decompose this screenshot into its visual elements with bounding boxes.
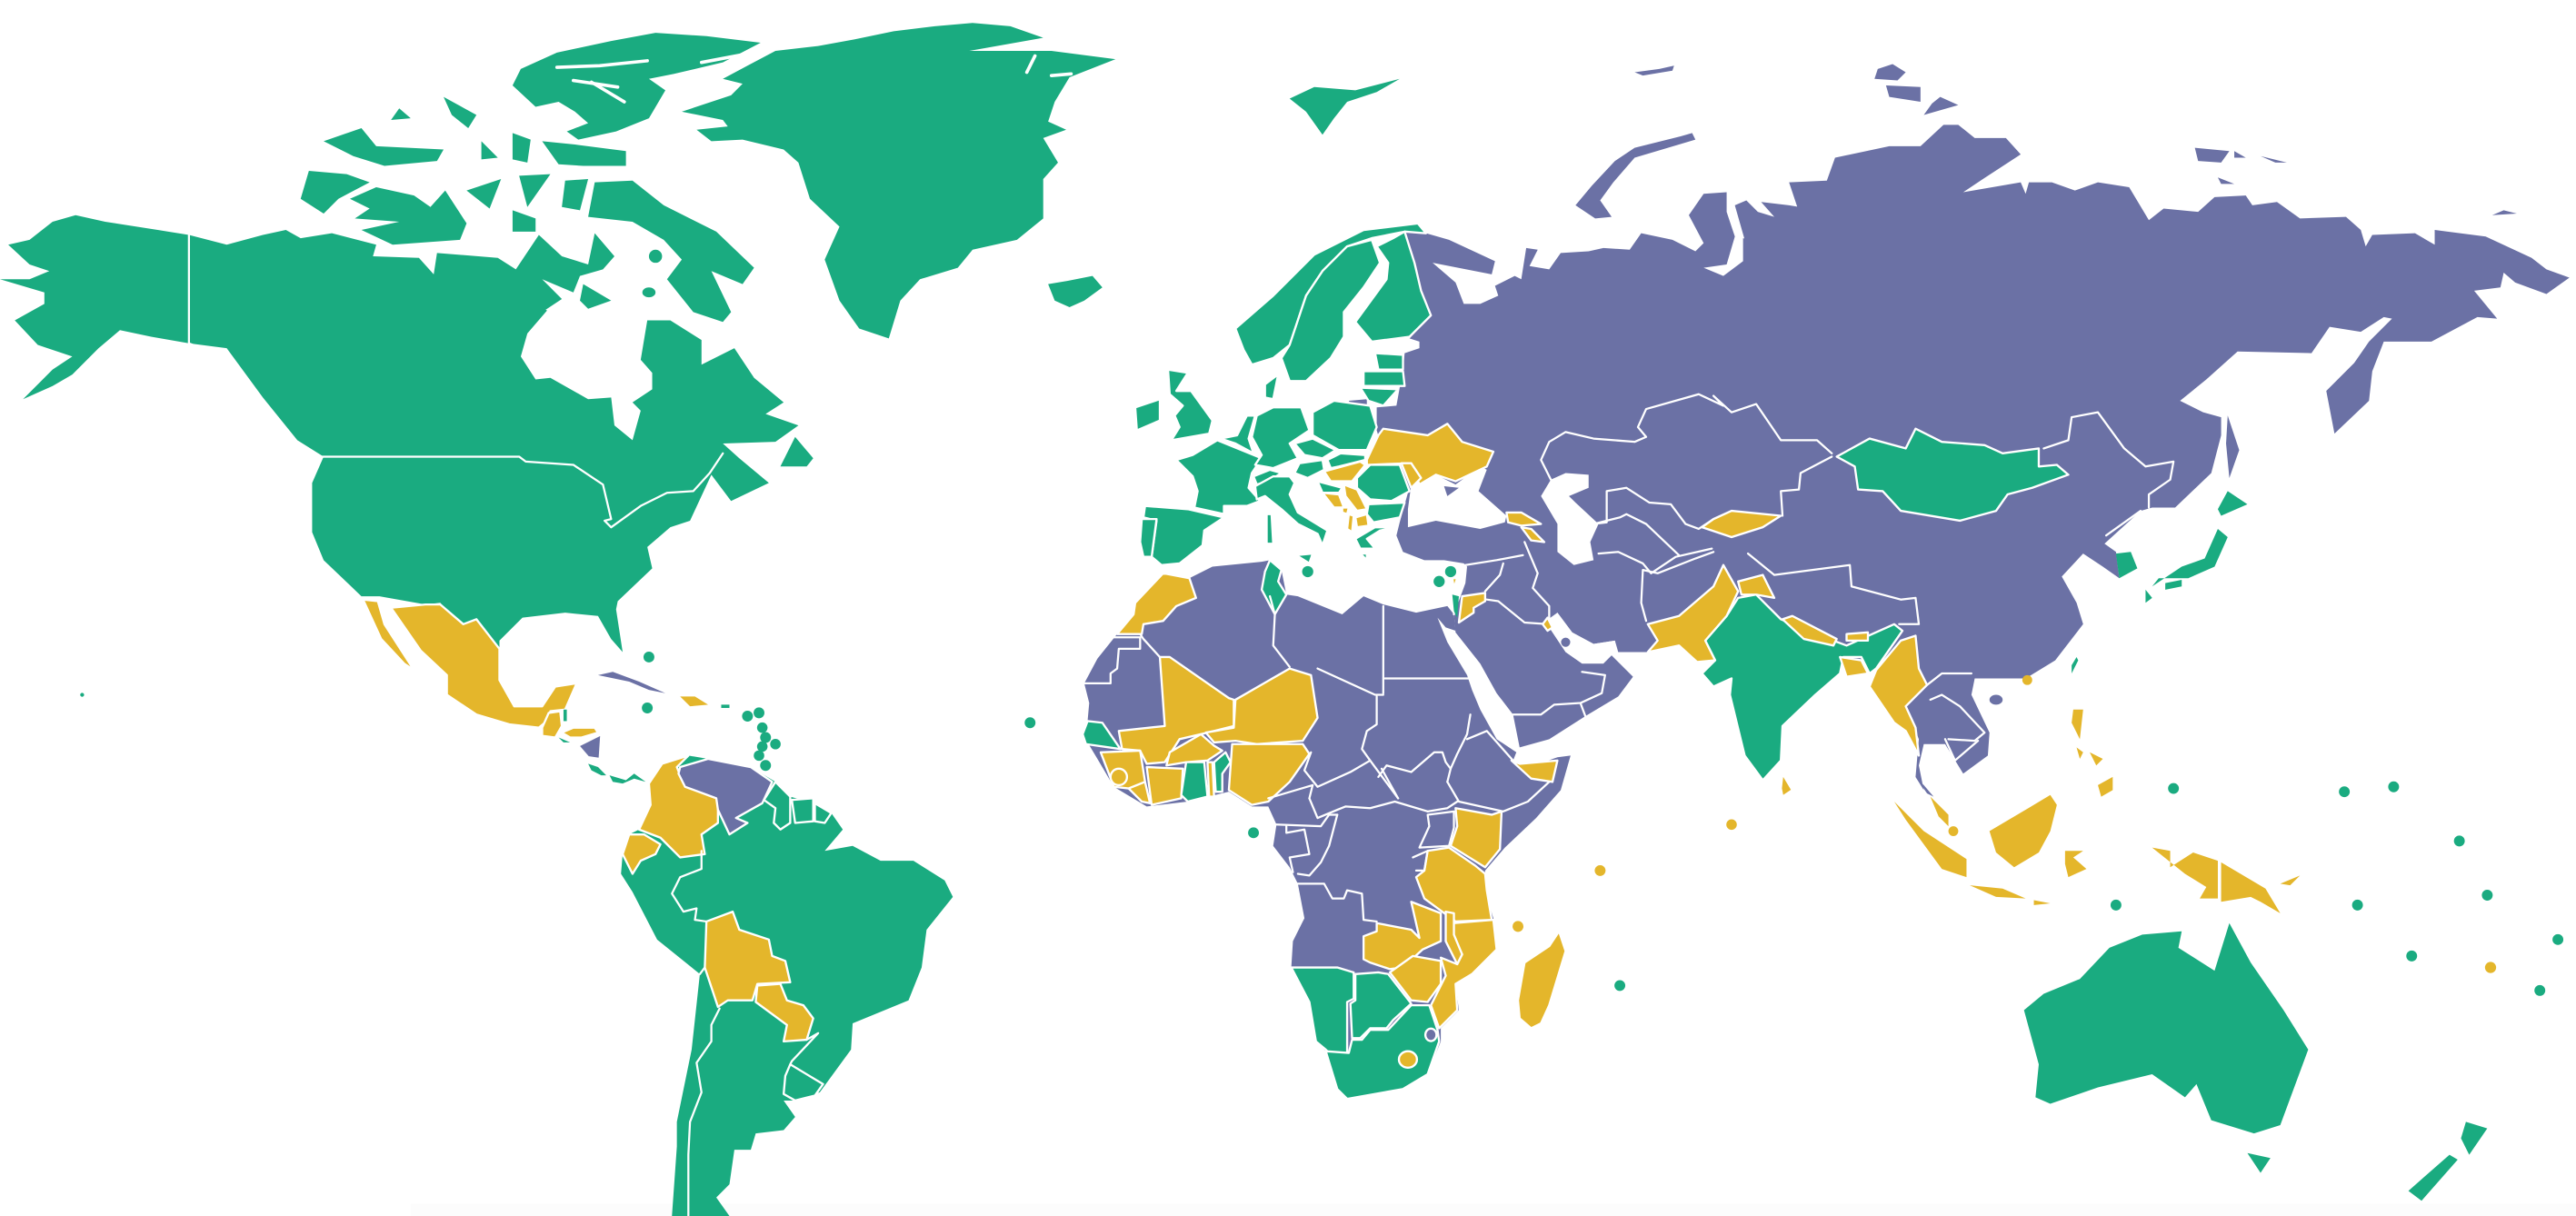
region: Australia and New Zealand <box>2024 923 2487 1201</box>
region: North America <box>0 215 814 680</box>
region: South America <box>621 755 953 1216</box>
region: Greenland, Iceland and Svalbard <box>682 23 1400 338</box>
region: Russia, Middle East and Asia mainland <box>1349 64 2570 797</box>
region: East Asia, green countries <box>2072 491 2248 673</box>
peninsulas: Crimea and Qatar <box>1444 486 1571 647</box>
seas: Black Sea, Caspian, Persian Gulf and Red Sea <box>1408 466 1615 663</box>
borders: South America <box>672 851 818 1215</box>
borders: Africa <box>1084 596 1549 922</box>
region: Africa <box>1083 560 1571 1099</box>
African countries: green <box>1083 560 1439 1099</box>
region: Europe and Caucasus, yellow countries <box>1323 424 1553 631</box>
fjords in Ellesmere and Greenland <box>557 53 1071 102</box>
small African states: Lesotho, Swaziland, Sierra Leone <box>1111 769 1436 1068</box>
Mediterranean island dots <box>1303 566 1456 587</box>
region: Caribbean <box>598 652 781 771</box>
region: Southeast Asia and New Guinea <box>1513 675 2496 973</box>
island state dots <box>80 693 2563 996</box>
region: Mongolia <box>1837 429 2069 521</box>
region: Mexico and Central America <box>363 600 645 783</box>
African countries: yellow <box>1101 573 1565 1028</box>
region: Canadian Arctic islands <box>301 33 761 322</box>
Israel <box>1453 594 1459 618</box>
South American countries <box>623 755 832 1101</box>
region: Europe, green countries <box>1135 224 1431 565</box>
region: South Asia <box>1648 511 1927 797</box>
borders: Canada, Alaska and USA <box>189 234 723 527</box>
borders: Central and East Asia <box>1454 394 2173 761</box>
